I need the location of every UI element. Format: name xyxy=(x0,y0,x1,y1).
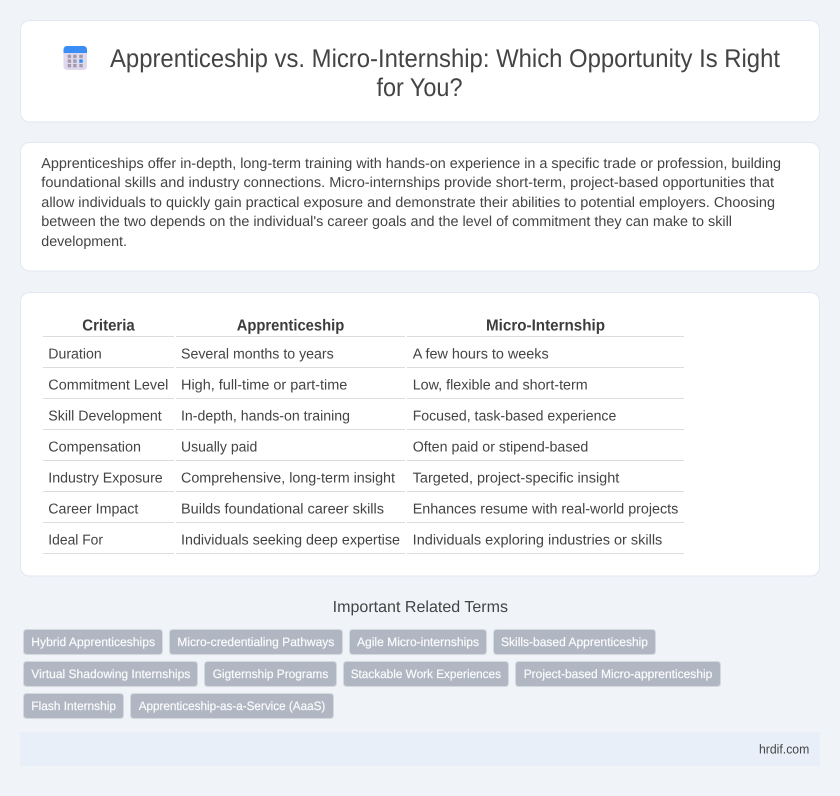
table row: skill development: Skill Development xyxy=(48,408,162,424)
tag: hybrid apprenticeships xyxy=(24,630,162,654)
table row: ideal for: Individuals seeking deep expertise xyxy=(181,532,400,548)
footer bar xyxy=(20,732,820,766)
tag: virtual shadowing internships xyxy=(24,662,198,686)
table row: commitment level: High, full-time or part-time xyxy=(181,377,347,393)
title xyxy=(110,45,780,102)
table row: compensation: Compensation xyxy=(48,439,141,455)
table row: duration: Several months to years xyxy=(181,346,334,362)
tag: micro-credentialing pathways xyxy=(170,630,342,654)
tag: stackable work experiences: Stackable Work Experiences xyxy=(351,667,501,681)
tag: gigternship programs: Gigternship Programs xyxy=(213,667,328,681)
related term tags xyxy=(24,630,720,718)
table header: Micro-Internship xyxy=(486,318,605,335)
tag: skills-based apprenticeship xyxy=(494,630,656,654)
tag: micro-credentialing pathways: Micro-credentialing Pathways xyxy=(177,635,334,649)
text block: introduction paragraph: foundational skills and industry connections. Micro-internships provide short-term, project-based opportunities that xyxy=(41,175,774,191)
tag: apprenticeship-as-a-service: Apprenticeship-as-a-Service (AaaS) xyxy=(139,699,325,713)
table row: industry exposure: Industry Exposure xyxy=(48,470,163,486)
table row: compensation xyxy=(43,439,684,461)
table row: skill development xyxy=(43,408,684,430)
tag: virtual shadowing internships: Virtual Shadowing Internships xyxy=(31,667,190,681)
table header: Apprenticeship xyxy=(237,318,345,335)
tag: agile micro-internships xyxy=(350,630,486,654)
table header: Criteria xyxy=(82,318,135,335)
table header xyxy=(43,318,684,337)
title: Apprenticeship vs. Micro-Internship: Which Opportunity Is Right xyxy=(110,45,780,73)
text block: introduction paragraph: development. xyxy=(41,234,127,250)
table row: compensation: Usually paid xyxy=(181,439,257,455)
tag: skills-based apprenticeship: Skills-based Apprenticeship xyxy=(501,635,648,649)
table row: ideal for: Individuals exploring industries or skills xyxy=(413,532,662,548)
table row: commitment level: Low, flexible and short-term xyxy=(413,377,588,393)
tag: gigternship programs xyxy=(204,662,336,686)
table row: skill development: Focused, task-based experience xyxy=(413,408,616,424)
table row: commitment level xyxy=(43,377,684,399)
tag: project-based micro-apprenticeship: Project-based Micro-apprenticeship xyxy=(524,667,713,681)
table row: compensation: Often paid or stipend-based xyxy=(413,439,588,455)
footer bar: hrdif.com xyxy=(759,741,809,756)
tag: hybrid apprenticeships: Hybrid Apprenticeships xyxy=(31,635,155,649)
table row: industry exposure xyxy=(43,470,684,492)
table row: career impact: Career Impact xyxy=(48,501,138,517)
tag: stackable work experiences xyxy=(344,662,508,686)
tag: apprenticeship-as-a-service xyxy=(130,694,334,718)
table row: career impact xyxy=(43,501,684,523)
text block: introduction paragraph xyxy=(41,156,781,250)
table row: industry exposure: Targeted, project-specific insight xyxy=(413,470,619,486)
table row: duration: A few hours to weeks xyxy=(413,346,549,362)
text block: introduction paragraph: allow individuals to quickly gain practical exposure and demonstrate their abilities to potential employers. Choosing xyxy=(41,195,775,211)
table row: industry exposure: Comprehensive, long-term insight xyxy=(181,470,395,486)
tag: agile micro-internships: Agile Micro-internships xyxy=(357,635,479,649)
table row: skill development: In-depth, hands-on training xyxy=(181,408,350,424)
text block: introduction paragraph: Apprenticeships offer in-depth, long-term training with hands-on experience in a specific trade or profession, building xyxy=(41,156,781,172)
panel: comparison table xyxy=(20,292,820,576)
table row: ideal for xyxy=(43,532,684,554)
table row: commitment level: Commitment Level xyxy=(48,377,168,393)
table row: duration xyxy=(43,346,684,368)
text block: introduction paragraph: between the two depends on the individual's career goals and the level of commitment they can make to skill xyxy=(41,214,732,230)
table row: duration: Duration xyxy=(48,346,102,362)
table row: career impact: Builds foundational career skills xyxy=(181,501,384,517)
heading: important related terms: Important Related Terms xyxy=(333,599,508,616)
tag: flash internship xyxy=(24,694,124,718)
tag: flash internship: Flash Internship xyxy=(31,699,116,713)
tag: project-based micro-apprenticeship xyxy=(516,662,720,686)
panel: introduction xyxy=(20,142,820,271)
icon: calendar xyxy=(64,46,87,70)
table row: career impact: Enhances resume with real-world projects xyxy=(413,501,678,517)
panel: title header xyxy=(20,20,820,122)
table row: ideal for: Ideal For xyxy=(48,532,103,548)
title: for You? xyxy=(376,74,462,102)
